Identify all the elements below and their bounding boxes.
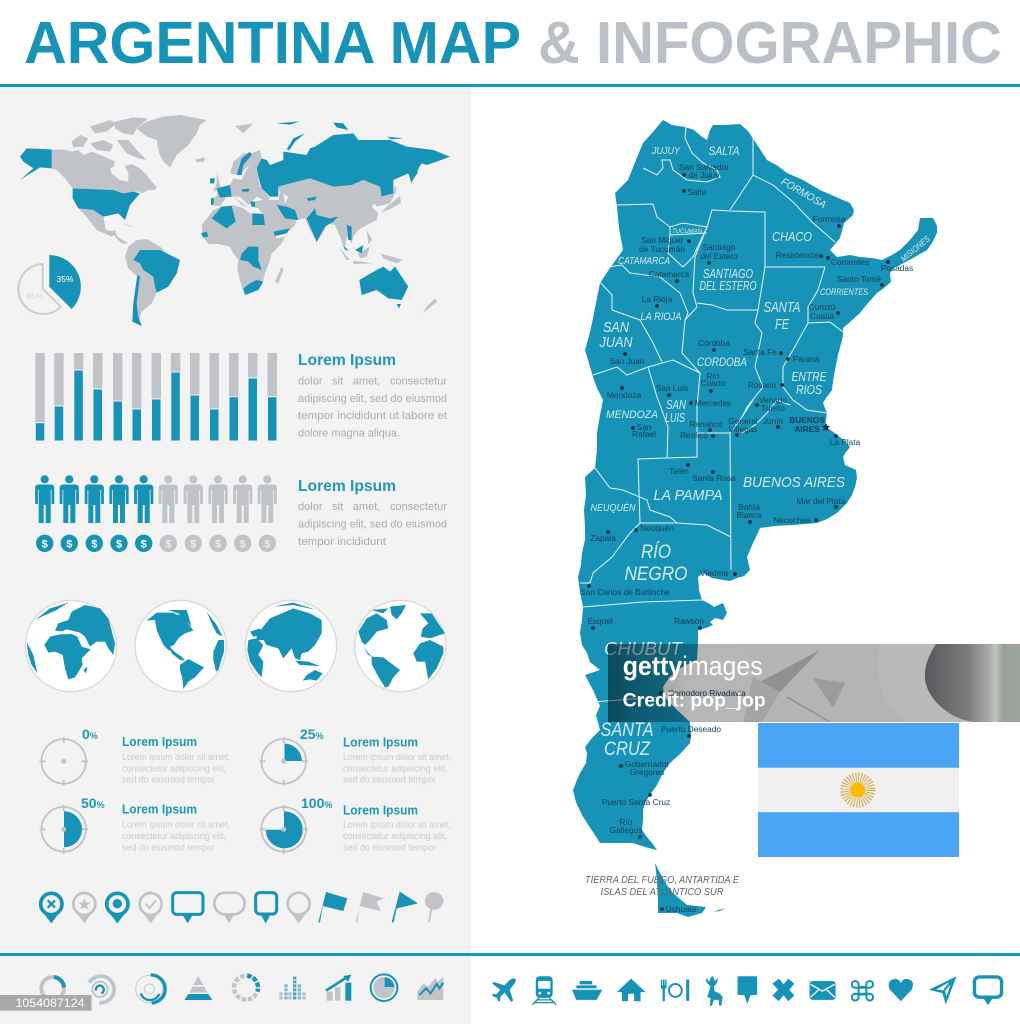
Argentina map (573, 120, 937, 917)
dollar coins: $ (215, 538, 221, 550)
text block: people: dolor sit amet, consectetur (298, 501, 447, 513)
icon: house (617, 979, 646, 1001)
dial 100%: Lorem Ipsum (343, 802, 418, 817)
speech bubble: teal rectangle (173, 893, 203, 923)
pin: dot (107, 893, 128, 923)
map: province labels: CATAMARCA (618, 256, 670, 267)
bottom left panel background (0, 956, 471, 1024)
icon: donut (41, 977, 64, 1000)
dollar coins: $ (141, 538, 147, 550)
map: city labels: Santiago (703, 242, 736, 252)
icon: cutlery (661, 980, 689, 1001)
dial 0%: consectetur adipiscing elit, (122, 763, 226, 773)
map: city labels: San Salvador (679, 162, 729, 172)
pin: gray ring (288, 893, 310, 923)
map: city labels: San Carlos de Bariloche (580, 587, 670, 597)
map: city labels: Paraná (793, 354, 820, 364)
text block: bar chart: dolor sit amet, consectetur (298, 376, 447, 388)
map: province labels: SANTA (600, 720, 654, 741)
map: city labels: San Juan (609, 356, 645, 366)
map: province labels: JUAN (599, 334, 633, 351)
map: city labels: Santo Tomé (837, 274, 881, 284)
map: city labels: Rafael (632, 429, 656, 439)
map: city labels: Posadas (881, 263, 913, 273)
map: city labels: AIRES (794, 424, 820, 434)
map: city labels: Curuzú (809, 302, 836, 312)
map: city labels: Río (620, 817, 633, 827)
map: province labels: RÍO (641, 542, 671, 563)
map: city labels: Resistencia (776, 250, 819, 260)
image id tag (0, 995, 92, 1011)
icon: heart (889, 979, 913, 1001)
map: city labels: de Jujuy (689, 170, 720, 180)
dial 50% (40, 795, 230, 854)
icon: map pin (738, 976, 757, 1004)
bar chart (35, 353, 277, 441)
map: city labels: San Miguel (641, 235, 683, 245)
map: province labels: CORDOBA (697, 355, 747, 369)
map: city labels: San (637, 422, 652, 432)
pin: star (73, 893, 95, 923)
icon: growth chart (326, 975, 351, 1001)
globe: Asia (245, 600, 337, 692)
map: city labels: de Tucumán (639, 244, 685, 254)
dollar coins: $ (116, 538, 122, 550)
map: province labels: SANTIAGO (703, 267, 753, 281)
bottom left chart icons (41, 974, 443, 1003)
icon: mountain chart (417, 977, 443, 1000)
speech bubble: teal square (256, 893, 277, 923)
icon: paper plane (929, 976, 957, 1005)
map: city labels: del Estero (700, 251, 738, 261)
dial 50%: 50% (81, 795, 105, 811)
icon: spiral (89, 976, 114, 1003)
map: city labels: Villegas (729, 424, 757, 434)
map: city labels: Cuarto (701, 378, 726, 388)
dial 100%: sed do eiusmod tempor (343, 842, 436, 852)
map: province labels: LA PAMPA (654, 487, 722, 504)
map: city labels: Gobernador (625, 759, 669, 769)
dial 100% (260, 795, 451, 854)
map: province labels: MISIONES (898, 233, 932, 264)
map: province labels: SALTA (708, 144, 740, 158)
map: Tierra del Fuego caption: TIERRA DEL FUEGO, ANTARTIDA E (585, 875, 739, 886)
icon: pyramid (184, 976, 212, 1000)
map: city labels: Formosa (813, 214, 846, 224)
dial 0%: Lorem Ipsum (122, 734, 197, 749)
dollar coins: $ (42, 538, 48, 550)
dollar coins: $ (190, 538, 196, 550)
map: province labels: BUENOS AIRES (743, 474, 845, 491)
map: city labels (580, 162, 913, 914)
dial 25%: sed do eiusmod tempor (343, 775, 436, 785)
dollar coins: $ (165, 538, 171, 550)
map: city labels: Zapala (590, 533, 616, 543)
map: city labels: Mar del Plata (797, 496, 846, 506)
flag: teal (318, 892, 347, 922)
pie chart 35% / 65%: 65% (26, 291, 44, 301)
dollar coins: $ (66, 538, 72, 550)
text block: bar chart (298, 352, 447, 440)
map: city labels: Corrientes (831, 257, 869, 267)
speech bubble: gray oval (214, 893, 245, 923)
text block: bar chart: tempor incididunt ut labore et (298, 410, 447, 422)
map: city labels: Neuquén (640, 523, 674, 533)
icon: command symbol (852, 981, 873, 1001)
dollar coins: $ (240, 538, 246, 550)
map: city labels: Puerto Santa Cruz (602, 797, 670, 807)
map: city labels: Santa Rosa (692, 473, 736, 483)
map: province labels: SANTA (764, 299, 800, 316)
icon: train (532, 976, 556, 1005)
map: city labels: Mendoza (607, 390, 641, 400)
map: city labels: Gregores (630, 767, 664, 777)
map: province labels: SAN (603, 319, 629, 336)
dial 0%: Lorem ipsum dolor sit amet, (122, 752, 230, 762)
dial 0% (40, 726, 230, 786)
map: province labels: DEL ESTERO (700, 279, 757, 293)
dial 25%: Lorem ipsum dolor sit amet, (343, 752, 451, 762)
map: city labels: Mercedes (695, 398, 731, 408)
title: & INFOGRAPHIC (538, 10, 1002, 76)
map: province labels: CORRIENTES (820, 287, 869, 298)
flag: gray (355, 892, 384, 922)
map: province labels (590, 144, 932, 760)
map: city labels: Tuerto (761, 403, 785, 413)
text block: people (298, 478, 447, 548)
dollar coins (36, 535, 276, 552)
dial 50%: Lorem Ipsum (122, 802, 197, 817)
map: Tierra del Fuego (655, 863, 706, 917)
map: city labels: Viedma (700, 568, 728, 578)
map: city labels: General (728, 416, 758, 426)
title (24, 10, 1002, 76)
globe: Africa and Europe (25, 600, 117, 692)
dial 50%: consectetur adipiscing elit, (122, 831, 226, 841)
title: ARGENTINA MAP (24, 10, 521, 76)
map: city labels: Córdoba (698, 338, 730, 348)
map: province labels: NEGRO (624, 564, 688, 585)
map: city labels: Catamarca (649, 269, 690, 279)
map: province labels: MENDOZA (606, 409, 658, 421)
icon: target ring (136, 975, 165, 1003)
left panel background (0, 87, 471, 953)
text block: bar chart: adipiscing elit, sed do eiusmod (298, 393, 447, 405)
text block: people: Lorem Ipsum (298, 478, 396, 495)
map: city labels: Bahía (738, 502, 760, 512)
dial 50%: Lorem ipsum dolor sit amet, (122, 820, 230, 830)
map: province labels: FE (775, 316, 790, 333)
dial 25%: 25% (300, 726, 324, 742)
icon: deer (706, 976, 723, 1006)
dial 100%: consectetur adipiscing elit, (343, 831, 447, 841)
map: province labels: CHACO (772, 229, 812, 244)
map: province labels: FORMOSA (779, 176, 828, 211)
map: city labels: Blanca (736, 510, 762, 520)
map: city labels: Puerto Deseado (661, 724, 721, 734)
icon: ship (572, 981, 602, 1000)
watermark banner (608, 644, 1020, 722)
dial 0%: 0% (82, 726, 98, 742)
map: city labels: Comodoro Rivadavia (668, 688, 746, 698)
map: city labels: Río (707, 371, 720, 381)
map: city labels: BUENOS (789, 415, 825, 425)
map: Isla de los Estados (713, 908, 725, 912)
dial 25%: consectetur adipiscing elit, (343, 763, 447, 773)
pin: gray ball (425, 892, 443, 922)
watermark banner: Credit: pop_jop (623, 690, 766, 712)
map: city labels: Necochea (773, 515, 811, 525)
text block: people: adipiscing elit, sed do eiusmod (298, 519, 447, 531)
dial 25%: Lorem Ipsum (343, 735, 418, 750)
map: province labels: CRUZ (604, 739, 651, 760)
icon: sun of May (845, 778, 870, 802)
text block: bar chart: dolore magna aliqua. (298, 428, 400, 440)
map: city labels: Gallegos (610, 825, 642, 835)
map: city labels: Renancó (689, 419, 723, 429)
map: city labels: Cuatiá (810, 311, 834, 321)
bottom right travel icons (492, 976, 1002, 1006)
map: city labels: Santa Fe (743, 347, 777, 357)
text block: people: tempor incididunt (298, 536, 386, 548)
map: province labels: ENTRE (792, 369, 827, 384)
dial 50%: sed do eiusmod tempor (122, 842, 215, 852)
flag of Argentina (758, 723, 959, 857)
icon: equalizer (281, 977, 304, 999)
map: city labels: Realicó (680, 430, 708, 440)
people pictogram (35, 475, 277, 523)
dial 0%: sed do eiusmod tempor (122, 775, 215, 785)
map: city labels: Esquel (587, 616, 613, 626)
globe: Americas (135, 600, 226, 692)
globes (25, 600, 446, 692)
pie chart 35% / 65% (18, 255, 81, 314)
map: city labels: Telén (669, 466, 689, 476)
map: city labels: Salta (688, 187, 707, 197)
dial 100%: 100% (301, 795, 332, 811)
map: city labels: Rosario (748, 380, 777, 390)
map: city labels: La Rioja (642, 294, 673, 304)
globe: Atlantic (355, 600, 446, 692)
map: province labels: RIOS (796, 382, 822, 397)
pin: cross (41, 893, 62, 923)
pie chart 35% / 65%: 35% (56, 274, 74, 284)
pin: check (140, 893, 162, 923)
icon: speech bubble (974, 977, 1002, 1005)
dollar coins: $ (264, 538, 270, 550)
map: province labels: NEUQUÉN (590, 501, 636, 514)
map: city labels: Junín (763, 416, 784, 426)
map: Tierra del Fuego caption (585, 875, 739, 898)
map: province labels: SAN (666, 397, 686, 412)
watermark banner: gettyimages (623, 651, 763, 681)
icon: segmented ring (234, 976, 258, 1000)
map: city labels: La Plata (830, 437, 861, 447)
map: province labels: CHUBUT (604, 639, 684, 659)
icon: cross (772, 979, 794, 1001)
map: province labels: LUIS (665, 410, 685, 425)
map: city labels: Venado (759, 395, 787, 405)
map: province labels: LA RIOJA (640, 311, 682, 323)
dial 25% (260, 726, 451, 786)
dial 100%: Lorem ipsum dolor sit amet, (343, 820, 451, 830)
text block: bar chart: Lorem Ipsum (298, 352, 396, 369)
map: city labels: Ushuaia (666, 904, 697, 914)
icon: envelope (810, 981, 836, 1000)
map: city markers (587, 173, 890, 911)
map: city labels: Rawson (674, 616, 704, 626)
map: province boundaries (580, 127, 843, 702)
map pins and flags row (41, 892, 443, 923)
world map (20, 115, 450, 326)
map: city labels: San Luis (656, 383, 688, 393)
map: Tierra del Fuego caption: ISLAS DEL ATLANTICO SUR (600, 887, 724, 898)
dollar coins: $ (91, 538, 97, 550)
icon: pie clock (371, 974, 397, 1001)
icon: airplane (492, 979, 516, 1002)
flag: teal triangle (392, 892, 418, 922)
image id tag: 1054087124 (16, 998, 85, 1010)
map: province labels: TUCUMAN (672, 228, 702, 235)
map: province labels: JUJUY (651, 146, 681, 157)
map: mainland outline (573, 120, 937, 850)
